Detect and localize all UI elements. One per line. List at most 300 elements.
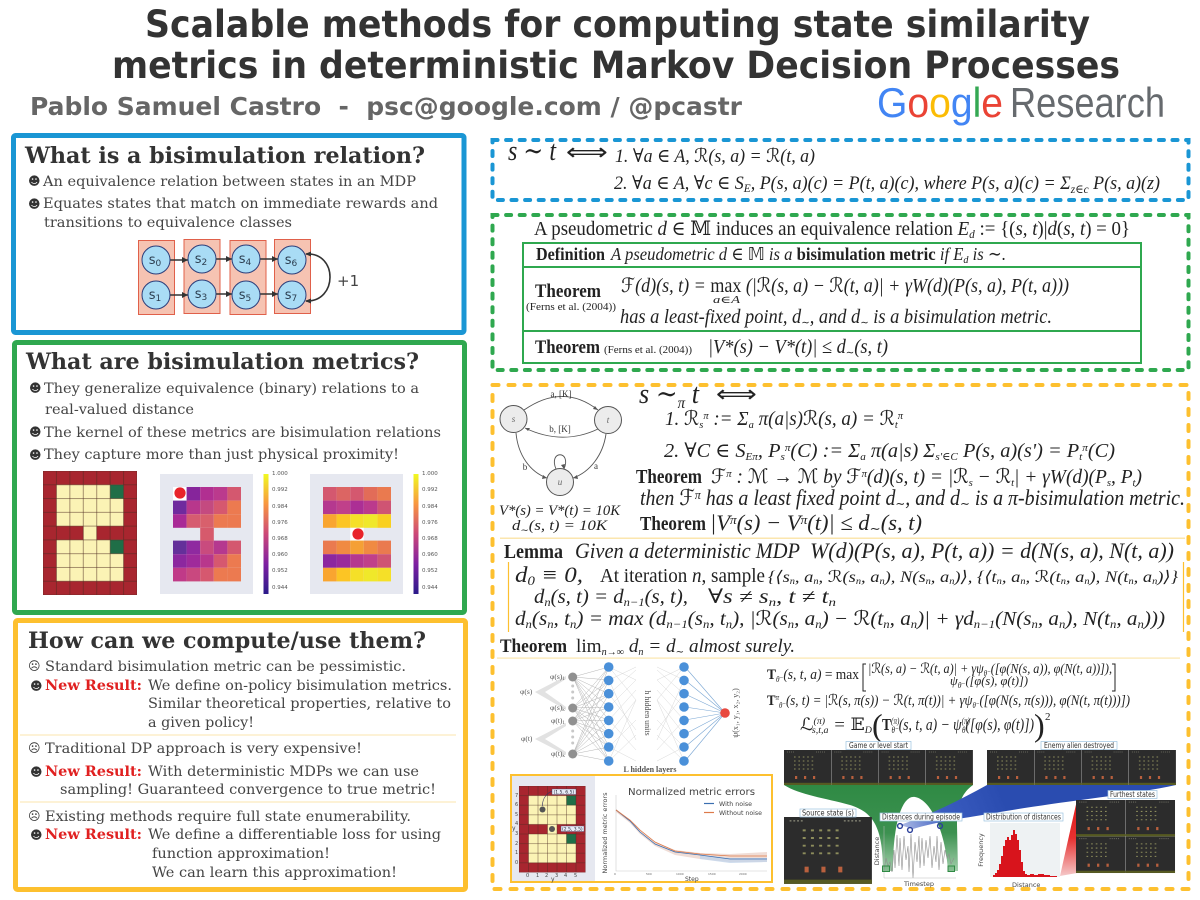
loss equations: θ (962, 725, 966, 735)
neural network diagram: φ(s) (520, 687, 533, 696)
colorbar 1: 0.976 (272, 520, 288, 526)
block: on-policy metrics: ☹ (28, 659, 41, 673)
sampling lemma: n (526, 617, 532, 631)
sampling lemma: , a (1002, 569, 1020, 586)
sampling lemma: , a (890, 608, 911, 630)
neural network diagram: L hidden layers (624, 765, 676, 774)
sampling lemma: (s, t) = d (551, 586, 625, 608)
sampling lemma: n−1 (624, 595, 645, 609)
sampling lemma: lim (576, 636, 602, 657)
figure: atari behavioral similarity (784, 741, 1176, 889)
theorem table: Theorem (535, 281, 601, 302)
sampling lemma: , a (1116, 608, 1138, 630)
pi-bisimulation definition: ℱ (711, 466, 727, 488)
pi-bisimulation definition: π (726, 468, 732, 480)
pi-bisimulation definition: s (780, 451, 785, 463)
sampling lemma: ), |ℛ(s (731, 608, 788, 630)
loss equations: ( (872, 707, 883, 743)
MDP state diagram: 3 (202, 293, 207, 303)
loss equations: ([φ(s), φ(t)]) (965, 673, 1028, 688)
pi-bisimulation definition: π (862, 468, 867, 480)
title: Scalable methods for computing state similarity (145, 3, 1090, 46)
loss equations: (s, t, a) (783, 667, 821, 683)
line chart: Without noise (719, 810, 762, 817)
pi-bisimulation definition: t (1079, 451, 1083, 463)
sampling lemma: , t ≠ t (776, 586, 829, 608)
block: on-policy metrics: Similar theoretical properties, relative to (148, 696, 451, 712)
sampling lemma: ), N(t (1064, 608, 1110, 630)
sampling lemma: )⟩, {⟨t (953, 569, 997, 586)
maze with sampled states: 3 (555, 873, 558, 879)
sampling lemma: Given a deterministic MDP (575, 538, 800, 563)
loss equations: = max (825, 667, 863, 683)
neural network diagram: h hidden units (643, 690, 652, 736)
distribution histogram: Frequency (977, 833, 985, 867)
pi-bisimulation definition: , P (1111, 466, 1133, 488)
bullet list: real-valued distance (45, 402, 194, 418)
sampling lemma: n (997, 576, 1002, 586)
gridworld map (43, 471, 137, 595)
title (112, 3, 1120, 87)
sampling lemma: n (570, 617, 576, 631)
loss equations: ([φ(N(s, a)), φ(N(t, a))]), (991, 662, 1112, 677)
sampling lemma: n→∞ (602, 647, 624, 658)
pi-bisimulation definition: , and d (905, 485, 961, 510)
theorem table: a∈A (713, 295, 741, 306)
theorem table: |V*(s) − V*(t)| ≤ d (708, 336, 858, 358)
pi-bisimulation definition: π (695, 487, 701, 502)
sampling lemma: )⟩} (1156, 569, 1179, 586)
loss equations: θ⁻ (972, 701, 979, 710)
pi-bisimulation definition: π (898, 410, 903, 422)
colorbar 1: 0.960 (272, 552, 288, 558)
pi-bisimulation definition: s (969, 477, 973, 489)
panel: bisimulation definition: z∈c (1070, 182, 1089, 196)
MDP state diagram: s (149, 288, 156, 303)
sampling lemma: 0 (527, 573, 535, 588)
theorem table: ℱ(d)(s, t) = max (|ℛ(s, a) − ℛ(t, a)| + γW(d)(P(s, a), P(t, a))) (621, 275, 1069, 297)
pi-bisimulation definition: π (801, 512, 808, 527)
maze with sampled states: 4 (564, 873, 567, 879)
MDP state diagram: s (239, 288, 246, 303)
sampling lemma: , a (861, 569, 879, 586)
pi-bisimulation definition: ∼ (895, 496, 905, 511)
neural network diagram: φ(t) (551, 716, 562, 725)
block: function approximation: We define a differentiable loss for using (148, 827, 441, 843)
pi-bisimulation definition: π (785, 442, 791, 454)
author line: Pablo Samuel Castro - psc@google.com / @pcastr (30, 92, 743, 121)
loss equations: 𝔼 (851, 715, 865, 734)
MDP example diagram: a (594, 461, 598, 471)
colorbar 2: 0.992 (422, 487, 438, 493)
pi-bisimulation definition: s (699, 419, 703, 431)
pi-bisimulation definition: 1. ℛ (665, 408, 701, 430)
loss equations: ψ (950, 673, 958, 688)
figure: normalized metric errors (511, 775, 772, 883)
theorem table: Definition (536, 244, 605, 264)
maze with sampled states: 2 (545, 873, 548, 879)
sampling lemma: At iteration n, sample (600, 565, 765, 587)
panel: bisimulation definition (492, 136, 1188, 200)
sampling lemma: , t (709, 608, 726, 630)
sampling lemma: n−1 (974, 617, 995, 631)
loss equations: ([φ(N(s, π(s))), φ(N(t, π(t)))]) (979, 693, 1130, 709)
line chart: 1000 (676, 872, 684, 876)
sampling lemma: n (949, 576, 955, 586)
sampling lemma: n (856, 576, 862, 586)
sampling lemma: n (638, 647, 643, 658)
bullet list: They capture more than just physical proximity! (44, 447, 399, 463)
sampling lemma: almost surely. (684, 636, 795, 657)
MDP example diagram: s (512, 414, 516, 424)
sampling lemma: , a (1038, 608, 1059, 630)
theorem table: has a least-fixed point, d (620, 306, 817, 328)
sampling lemma: (s, t), (645, 586, 688, 608)
sampling lemma: d (515, 562, 526, 587)
loss equations: θ⁻ (779, 701, 786, 710)
pi-bisimulation definition: ∼ (870, 521, 881, 536)
block: sampling (28, 741, 436, 798)
sampling lemma: n (1059, 617, 1065, 631)
maze with sampled states: (1.5, 6.5) (554, 790, 574, 796)
pi-bisimulation definition: 2. ∀C ∈ S (664, 440, 744, 462)
theorem table: ∼ (801, 317, 810, 329)
bullet list: They generalize equivalence (binary) relations to a (44, 381, 419, 397)
sampling lemma: n (1084, 576, 1090, 586)
MDP state diagram: s (239, 252, 246, 267)
loss equations: = (828, 715, 851, 734)
loss equations: D (864, 725, 873, 735)
distances during episode chart (873, 812, 962, 888)
pi-bisimulation definition: t (685, 379, 700, 410)
MDP state diagram: 2 (202, 258, 207, 268)
sampling lemma: , t (554, 608, 570, 630)
distribution histogram: Distribution of distances (986, 812, 1061, 822)
neural network diagram: k (562, 708, 565, 713)
theorem table: , and d (810, 306, 861, 328)
loss equations: T (767, 693, 776, 709)
sampling lemma: ∼ (676, 647, 684, 658)
sampling lemma: {⟨s (768, 569, 787, 586)
pi-bisimulation definition: then ℱ (640, 485, 701, 510)
colorbar 1: 0.992 (272, 487, 288, 493)
distribution histogram (977, 812, 1063, 889)
maze with sampled states: 4 (515, 821, 518, 827)
distances during episode chart: Timestep (903, 880, 934, 888)
neural network diagram: φ(t) (551, 749, 562, 758)
block: sampling: New Result: (45, 764, 142, 780)
panel: bisimulation definition: 1. ∀a ∈ A, ℛ(s, a) = ℛ(t, a) (615, 146, 815, 167)
sampling lemma: n (769, 595, 776, 609)
loss equations: |ℛ(s, a) − ℛ(t, a)| + γψ (868, 662, 1001, 677)
theorem table (523, 243, 1141, 363)
panel: bisimulation definition: ⟺ (566, 138, 608, 166)
loss equations: θ⁻ (776, 675, 783, 684)
MDP state diagram: 6 (292, 259, 298, 269)
bullet list: ☻ (29, 425, 42, 439)
sampling lemma: n (879, 576, 885, 586)
maze with sampled states: 7 (515, 793, 518, 799)
sampling lemma: , a (931, 569, 949, 586)
pi-bisimulation definition: s'∈C (935, 451, 959, 463)
loss equations: θ⁻ (891, 725, 899, 735)
maze with sampled states: 0 (526, 873, 529, 879)
colorbar 1: 0.952 (272, 568, 288, 574)
MDP example diagram: ∼ (520, 525, 529, 535)
maze with sampled states: 3 (515, 831, 518, 837)
sampling lemma (500, 538, 1184, 658)
line chart: 1500 (708, 872, 716, 876)
block: function approximation: ☻ (30, 828, 43, 842)
heading: What is a bisimulation relation? (24, 143, 425, 169)
colorbar 2 (414, 471, 438, 594)
sampling lemma: ) − ℛ(t (821, 608, 884, 630)
pi-bisimulation definition: , P (758, 440, 780, 462)
loss equations: (π) (814, 716, 825, 726)
pi-bisimulation definition: π (703, 410, 709, 422)
MDP example diagram: a, [K] (550, 389, 572, 399)
colorbar 2: 0.976 (422, 520, 438, 526)
heatmap: distances from top-left state (160, 474, 253, 594)
colorbar 1: 0.984 (272, 504, 288, 510)
panel: what are bisimulation metrics (14, 342, 464, 612)
pi-bisimulation definition (636, 379, 1185, 536)
loss equations: s,t,a (812, 725, 829, 735)
colorbar 1: 1.000 (272, 471, 288, 477)
loss equations: π (776, 693, 780, 702)
block: on-policy metrics: We define on-policy bisimulation metrics. (148, 678, 452, 694)
pi-bisimulation definition: s (1107, 477, 1111, 489)
MDP state diagram (138, 240, 359, 314)
maze with sampled states: 0 (515, 860, 518, 866)
colorbar 2: 0.944 (422, 585, 438, 591)
sampling lemma: n (813, 576, 819, 586)
MDP state diagram: s (285, 253, 292, 268)
sampling lemma: ≡ 0, (535, 562, 583, 587)
panel: on-policy bisimulation and sampling (492, 379, 1188, 889)
enemy destroyed frames (987, 741, 1176, 785)
pi-bisimulation definition: a (749, 419, 754, 431)
block: function approximation: ☹ (28, 809, 41, 823)
pi-bisimulation definition: ∼ (960, 496, 970, 511)
colorbar 1 (264, 471, 288, 594)
bullet list: An equivalence relation between states in an MDP (42, 174, 416, 190)
maze with sampled states: 6 (515, 802, 518, 808)
block: sampling: ☻ (30, 765, 43, 779)
theorem table: ∼ (860, 317, 869, 329)
sampling lemma: n−1 (666, 617, 688, 631)
panel: bisimulation definition: , P(s, a)(c) = P(t, a)(c), where P(s, a)(c) = Σ (751, 173, 1071, 194)
pi-bisimulation definition: (C) (1088, 440, 1115, 462)
sampling lemma: n (726, 617, 732, 631)
game start frames (784, 741, 973, 785)
neural network diagram: ψ(x₁, y₁, x₂, y₂) (731, 688, 740, 738)
pi-bisimulation definition: a (860, 451, 866, 463)
panel: bisimulation metrics theorems: s, t)|d(s, t) = 0} (1015, 218, 1133, 240)
pi-bisimulation definition: − ℛ (973, 466, 1011, 488)
sampling lemma: n (703, 617, 709, 631)
sampling lemma: = d (643, 636, 676, 657)
loss equations: θ⁻ (984, 669, 991, 678)
MDP example diagram: b, [K] (549, 424, 571, 434)
source state frame (784, 808, 872, 884)
MDP example diagram: u (558, 477, 563, 487)
maze with sampled states: 5 (574, 873, 577, 879)
pi-bisimulation definition: π(a|s) Σ (866, 440, 936, 462)
colorbar 2: 0.960 (422, 552, 438, 558)
neural network diagram: 1 (562, 677, 565, 682)
panel: what is a bisimulation relation (14, 136, 464, 332)
pi-bisimulation definition: |V (710, 510, 730, 535)
pi-bisimulation definition: π (678, 395, 686, 412)
sampling lemma: d (534, 586, 544, 608)
pi-bisimulation definition: π(a|s)ℛ(s, a) = ℛ (754, 408, 895, 430)
pi-bisimulation definition: s ∼ (639, 379, 680, 410)
heading: What are bisimulation metrics? (25, 349, 419, 375)
sampling lemma: ), N(t (1088, 569, 1129, 586)
sampling lemma: Theorem (500, 636, 567, 657)
panel: bisimulation metrics theorems: := {( (975, 218, 1016, 240)
colorbar 2: 1.000 (422, 471, 438, 477)
sampling lemma: ), N(s (883, 569, 926, 586)
block: function approximation: function approximation! (152, 846, 330, 862)
MDP example diagram: d (512, 518, 520, 534)
pi-bisimulation definition: (s) − V (737, 510, 803, 535)
block: function approximation: We can learn this approximation! (152, 865, 397, 881)
bullet list: ☻ (28, 174, 41, 188)
heatmap: distances from corridor state (310, 474, 403, 594)
theorem table: (Ferns et al. (2004)) (604, 344, 692, 356)
bullet list: ☻ (29, 448, 42, 462)
sampling lemma: n (790, 576, 796, 586)
MDP example diagram: b (523, 462, 528, 472)
bullet list (29, 381, 441, 463)
colorbar 2: 0.952 (422, 568, 438, 574)
block: sampling: Traditional DP approach is very expensive! (45, 741, 362, 757)
sampling lemma: d (515, 608, 525, 630)
panel: bisimulation metrics theorems: A pseudometric d ∈ 𝕄 induces an equivalence relation E (534, 218, 970, 240)
pi-bisimulation definition: π (730, 512, 737, 527)
block: on-policy metrics: Standard bisimulation metric can be pessimistic. (45, 659, 406, 675)
sampling lemma: n (788, 617, 794, 631)
bullet list: ☻ (28, 197, 41, 211)
sampling lemma: ∀s ≠ s (708, 586, 757, 608)
sampling lemma: , a (1134, 569, 1152, 586)
sampling lemma: , a (794, 608, 815, 630)
block: function approximation: New Result: (45, 827, 142, 843)
maze with sampled states: y (551, 876, 555, 883)
MDP state diagram: s (195, 252, 202, 267)
MDP state diagram: 1 (156, 294, 161, 304)
enemy destroyed frames: Enemy alien destroyed (1044, 741, 1114, 750)
loss equations: T (882, 715, 892, 734)
loss equations: 2 (1045, 711, 1050, 723)
loss equations: (s, t) = |ℛ(s, π(s)) − ℛ(t, π(t))| + γψ (786, 693, 973, 709)
sampling lemma: n (1110, 617, 1116, 631)
sampling lemma: , ℛ(s (819, 569, 856, 586)
theorem table: is ∼. (968, 244, 1006, 264)
sampling lemma: (N(s (995, 608, 1032, 630)
distances during episode chart: Distance (873, 837, 881, 865)
block: sampling: With deterministic MDPs we can use (148, 764, 419, 780)
line chart: 0 (614, 872, 616, 876)
neural network diagram: 1 (562, 721, 565, 726)
panel: bisimulation definition: s ∼ t (508, 136, 557, 167)
loss equations: T (767, 667, 776, 683)
MDP example diagram: (s, t) = 10K (529, 518, 608, 534)
pi-bisimulation definition: (d)(s, t) = |ℛ (867, 466, 969, 488)
title: metrics in deterministic Markov Decision Processes (112, 44, 1120, 87)
logo: Google Research: Research (1010, 79, 1165, 126)
bullet list: ☻ (29, 381, 42, 395)
pi-bisimulation definition: Theorem (636, 466, 702, 488)
bullet list: The kernel of these metrics are bisimulation relations (44, 425, 441, 441)
sampling lemma: , a (1066, 569, 1084, 586)
pi-bisimulation definition: ⟺ (716, 380, 757, 408)
line chart: 2000 (739, 872, 747, 876)
maze with sampled states (512, 786, 586, 883)
sampling lemma: n (1138, 617, 1144, 631)
line chart: Normalized metric errors (601, 792, 609, 874)
MDP state diagram: s (195, 287, 202, 302)
block: on-policy metrics: a given policy! (148, 715, 254, 731)
loss equations (767, 662, 1130, 743)
loss equations: (s, t, a) − ψ (899, 715, 962, 734)
sampling lemma: (s (532, 608, 547, 630)
MDP example diagram: V*(s) = V*(t) = 10K (499, 503, 621, 519)
maze with sampled states: 5 (515, 812, 518, 818)
panel: bisimulation metrics theorems (492, 215, 1188, 370)
sampling lemma: ))) (1143, 608, 1165, 630)
heading: How can we compute/use them? (28, 628, 426, 654)
sampling lemma: n (1128, 576, 1134, 586)
loss equations: ([φ(s), φ(t)]) (966, 715, 1034, 734)
block: function approximation: Existing methods require full state enumerability. (45, 809, 411, 825)
block: on-policy metrics: New Result: (45, 678, 142, 694)
MDP state diagram: 7 (292, 294, 297, 304)
MDP example diagram: t (607, 415, 610, 425)
theorem table: (s, t) (854, 336, 888, 358)
logo: Google Research: Google (877, 79, 1003, 126)
loss equations: (π) (891, 716, 899, 726)
pi-bisimulation definition: : ℳ → ℳ by ℱ (732, 466, 862, 488)
pi-bisimulation definition: := Σ (709, 408, 749, 430)
loss equations: θ⁻ (958, 681, 965, 690)
line chart: 500 (646, 872, 652, 876)
loss equations: ℒ (800, 715, 812, 734)
neural network diagram: φ(t) (521, 734, 533, 743)
pi-bisimulation definition: t (1133, 477, 1136, 489)
block: sampling: ☹ (28, 741, 41, 755)
theorem table: d (963, 254, 969, 266)
sampling lemma: d (624, 636, 639, 657)
MDP example diagram (499, 389, 622, 535)
maze with sampled states: (2.5, 3.5) (562, 826, 583, 832)
pi-bisimulation definition: Eπ (744, 451, 758, 463)
block: sampling: sampling! Guaranteed convergence to true metric! (60, 782, 436, 798)
MDP state diagram: 4 (246, 258, 252, 268)
sampling lemma: n (815, 617, 822, 631)
panel: bisimulation metrics theorems: d (969, 227, 976, 241)
sampling lemma: n (1061, 576, 1066, 586)
theorem table: (Ferns et al. (2004)) (526, 301, 616, 313)
maze with sampled states: y (512, 825, 516, 832)
colorbar 1: 0.968 (272, 536, 288, 542)
sampling lemma: W(d)(P(s, a), P(t, a)) = d(N(s, a), N(t, a)) (810, 538, 1174, 563)
distances during episode chart: Distances during episode (882, 812, 960, 822)
blue funnel (900, 785, 1176, 829)
MDP state diagram: 0 (156, 259, 162, 269)
